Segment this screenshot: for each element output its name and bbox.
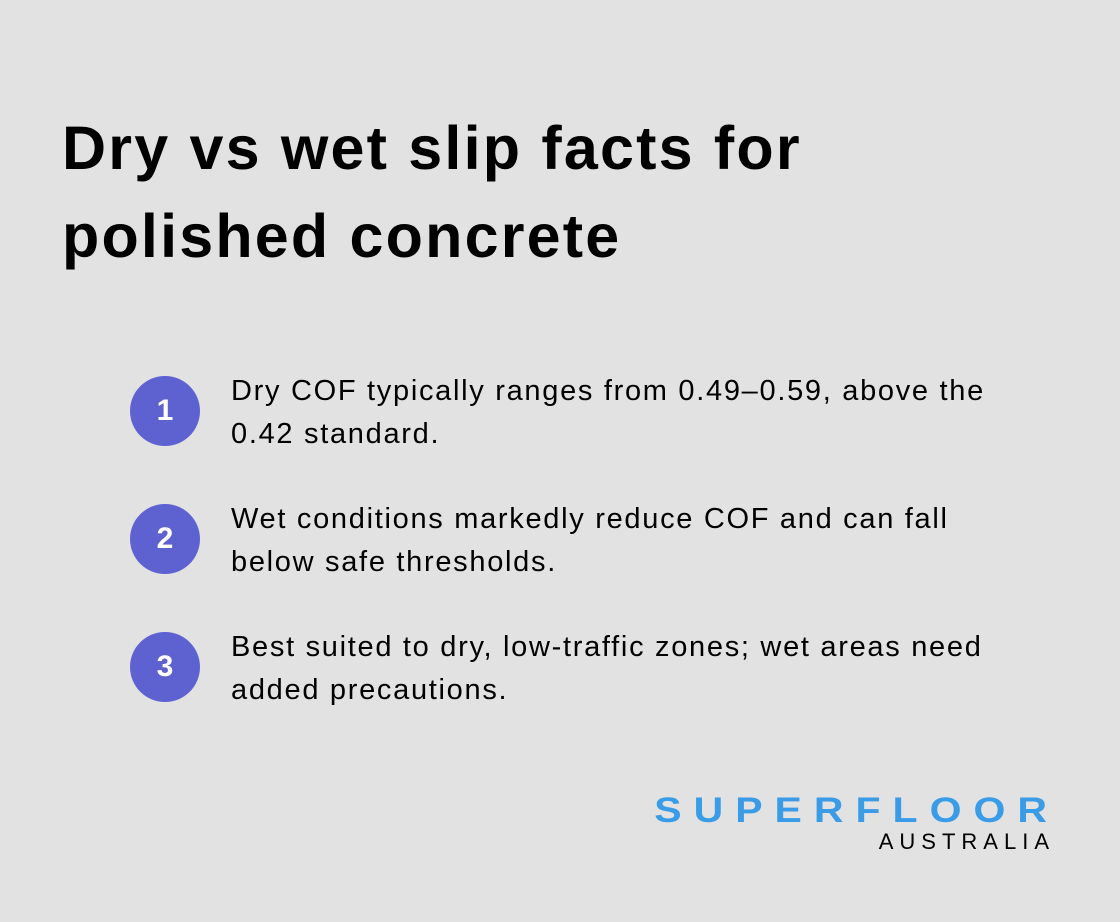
item 2 [130,503,949,578]
number badge 2 [130,504,200,574]
text 3: added precautions. [231,674,508,706]
text 1: Dry COF typically ranges from 0.49–0.59, above the [231,375,985,407]
number badge 3: 3 [157,650,173,683]
number badge 1: 1 [157,394,173,427]
logo wordmark: SUPERFLOOR [654,790,1059,830]
number badge 2: 2 [157,522,173,555]
text 3 [231,631,983,706]
item 1 [130,375,985,450]
title: polished concrete [62,202,621,270]
text 2 [231,503,949,578]
text 2: Wet conditions markedly reduce COF and can fall [231,503,949,535]
logo [654,790,1059,854]
text 1 [231,375,985,450]
logo subtitle: AUSTRALIA [879,829,1055,854]
text 2: below safe thresholds. [231,546,557,578]
item 3 [130,631,983,706]
title [62,114,802,270]
text 1: 0.42 standard. [231,418,440,450]
title: Dry vs wet slip facts for [62,114,802,182]
number badge 1 [130,376,200,446]
number badge 3 [130,632,200,702]
text 3: Best suited to dry, low-traffic zones; wet areas need [231,631,983,663]
